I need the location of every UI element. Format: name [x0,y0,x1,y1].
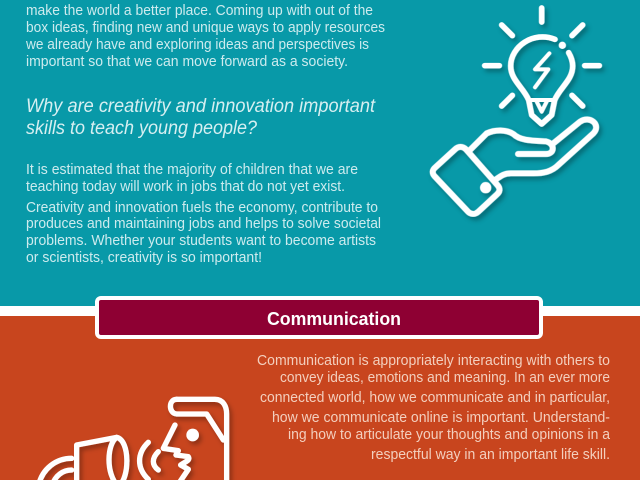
text block: creativity introduction: we already have and exploring ideas and perspectives is [25,37,369,53]
text block: communication description: how we communicate online is important. Understand- [272,410,610,426]
text block: communication description: respectful way in an important life skill. [371,447,610,463]
text block: economy and society [26,200,381,266]
text block: communication description: ing how to articulate your thoughts and opinions in a [288,427,611,443]
divider band [0,306,640,316]
icon: light bulb above open hand [433,8,599,214]
text block: economy and society: Creativity and innovation fuels the economy, contribute to [26,200,378,216]
text block: creativity introduction: make the world a better place. Coming up with out of the [26,3,373,19]
text block: creativity introduction: important so that we can move forward as a society. [26,54,348,70]
heading banner: communication: Communication [267,309,401,329]
text block: future jobs [26,162,358,195]
text block: creativity introduction: box ideas, finding new and unique ways to apply resources [26,20,385,36]
text block: economy and society: problems. Whether your students want to become artists [26,233,376,249]
text block: communication description: Communication is appropriately interacting with others to [257,353,610,369]
heading: why creativity and innovation matter [26,96,376,139]
heading: why creativity and innovation matter: skills to teach young people? [26,118,257,139]
text block: communication description: convey ideas, emotions and meaning. In an ever more [280,370,610,386]
text block: future jobs: It is estimated that the majority of children that we are [26,162,358,178]
heading banner: communication [97,298,541,337]
text block: economy and society: produces and maintaining jobs and helps to solve societal [26,216,381,232]
panel: communication [0,316,640,480]
text block: communication description [257,353,611,463]
heading: why creativity and innovation matter: Why are creativity and innovation important [26,96,376,117]
text block: economy and society: or scientists, creativity is so important! [26,250,262,266]
icon: megaphone and speaking head [38,399,227,480]
text block: communication description: connected world, how we communicate and in particular, [260,390,610,406]
text block: creativity introduction [25,3,385,70]
panel: creativity and innovation [0,0,640,306]
text block: future jobs: teaching today will work in jobs that do not yet exist. [26,179,345,195]
